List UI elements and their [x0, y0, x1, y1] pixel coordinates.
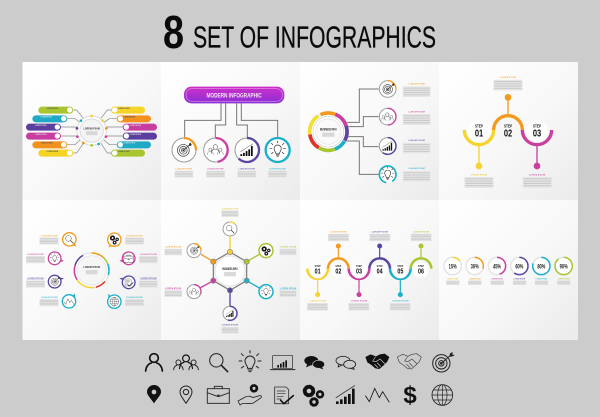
panel: circle with bubbles — [26, 233, 158, 308]
ring 60% — [511, 257, 528, 285]
pill labels: LOREM IPSUM — [129, 134, 142, 136]
stems — [476, 94, 540, 169]
icon row 1 — [146, 351, 455, 372]
icon: zigzag line — [365, 388, 389, 402]
icon: handshake outline — [397, 354, 421, 369]
icon: laptop chart — [270, 356, 295, 370]
icon: speech bubbles outline — [336, 356, 356, 369]
icon: light bulb — [239, 351, 261, 372]
step numbers: 05 — [397, 269, 403, 276]
panel: percentage rings — [444, 257, 572, 285]
icon: hand with gear — [238, 385, 261, 405]
step captions — [307, 232, 432, 311]
ring 90%: LOREM IPSUM — [558, 278, 570, 280]
node: upper left: LOREM IPSUM — [165, 247, 181, 249]
item 2: LOREM IPSUM — [408, 111, 425, 113]
item: people: LOREM IPSUM — [207, 168, 224, 170]
item: target: LOREM IPSUM — [175, 168, 192, 170]
connectors — [347, 89, 379, 174]
ring 60%: 60% — [515, 264, 524, 270]
item: bulb: LOREM IPSUM — [269, 168, 286, 170]
multicolour ring — [303, 106, 354, 157]
connectors — [61, 110, 123, 153]
step 02: 02 — [504, 128, 512, 139]
ring 45%: 45% — [493, 264, 501, 270]
bubble top left: LOREM IPSUM — [41, 235, 58, 237]
step circles — [310, 262, 429, 278]
step numbers: STEP — [315, 264, 321, 268]
step numbers: 04 — [377, 269, 383, 276]
node: top: LOREM IPSUM — [222, 208, 238, 210]
hexagon centre: BUSINESS INFO — [222, 267, 238, 271]
ring 90% — [555, 257, 572, 285]
step numbers: 06 — [418, 269, 424, 276]
central ring: LOREM IPSUM — [83, 267, 100, 269]
ring 30% — [466, 257, 483, 285]
ring 80% — [533, 257, 550, 285]
ring 15%: 15% — [449, 264, 457, 270]
icon: gears — [304, 386, 323, 406]
pill labels: LOREM IPSUM — [46, 108, 59, 110]
step numbers: STEP — [335, 264, 341, 268]
panel: radial pills infographic — [26, 107, 157, 157]
pill labels: LOREM IPSUM — [123, 143, 136, 145]
step numbers — [315, 264, 424, 276]
item 1: LOREM IPSUM — [408, 84, 425, 86]
step captions: LOREM IPSUM — [351, 301, 367, 303]
bubble bottom left: LOREM IPSUM — [41, 297, 58, 299]
step numbers: 02 — [335, 269, 341, 276]
panel: six steps — [307, 232, 432, 311]
step captions: LOREM IPSUM — [500, 77, 516, 79]
step captions: LOREM IPSUM — [529, 174, 545, 176]
item 3: LOREM IPSUM — [408, 140, 425, 142]
step 03 — [526, 120, 548, 142]
ring 45% — [488, 257, 506, 285]
icon: target — [433, 352, 455, 372]
step numbers: STEP — [377, 264, 383, 268]
title: SET OF INFOGRAPHICS — [193, 20, 436, 54]
step 01 — [468, 120, 490, 142]
step 01: 01 — [475, 128, 483, 139]
step numbers: STEP — [397, 264, 403, 268]
title — [163, 6, 436, 58]
pill labels: LOREM IPSUM — [40, 117, 53, 119]
step captions: LOREM IPSUM — [330, 232, 347, 234]
hexagon nodes — [211, 249, 249, 293]
central ring: LOREM IPSUM — [83, 128, 100, 130]
node: upper right: LOREM IPSUM — [280, 247, 296, 249]
pill labels: LOREM IPSUM — [35, 125, 47, 127]
pill labels: LOREM IPSUM — [46, 151, 59, 153]
panel: hexagon — [164, 208, 297, 334]
bubble mid right 1: LOREM IPSUM — [140, 254, 157, 256]
icon: group — [174, 355, 198, 370]
icon: handshake solid — [365, 354, 389, 369]
node: lower left: LOREM IPSUM — [165, 288, 181, 290]
step 01: STEP — [475, 124, 483, 129]
ring 60%: LOREM IPSUM — [513, 278, 526, 280]
bubble bottom right: LOREM IPSUM — [126, 297, 143, 299]
step captions — [464, 77, 552, 188]
panel backgrounds — [22, 62, 578, 340]
icon: briefcase — [207, 386, 229, 403]
bubble mid right 2: LOREM IPSUM — [140, 278, 157, 280]
item: chart: LOREM IPSUM — [238, 168, 255, 170]
step numbers: 03 — [356, 269, 362, 276]
ring 30%: 30% — [471, 264, 479, 270]
pill labels — [35, 108, 142, 153]
item 4: LOREM IPSUM — [408, 168, 425, 170]
panel: three steps — [464, 77, 552, 188]
panel: modern infographic — [172, 87, 290, 178]
ring 15%: LOREM IPSUM — [447, 278, 459, 280]
pill labels: LOREM IPSUM — [35, 134, 47, 136]
header pill: MODERN INFOGRAPHIC — [206, 92, 262, 99]
connectors — [185, 103, 278, 139]
pill labels: LOREM IPSUM — [118, 108, 130, 110]
node: bottom: LOREM IPSUM — [222, 325, 238, 327]
icon row 2 — [147, 382, 453, 409]
ring 15% — [444, 257, 461, 285]
icon: map pin solid — [147, 385, 161, 403]
icon: person — [146, 354, 162, 371]
right pills — [111, 107, 157, 157]
bubble mid left 1: LOREM IPSUM — [27, 254, 44, 256]
pill labels: LOREM IPSUM — [41, 143, 53, 145]
ring 30%: LOREM IPSUM — [469, 278, 481, 280]
title: 8 — [163, 6, 184, 58]
icon: speech bubbles solid — [304, 356, 325, 369]
step captions: LOREM IPSUM — [309, 301, 326, 303]
pill labels: LOREM IPSUM — [123, 117, 136, 119]
step numbers: 01 — [315, 269, 321, 276]
icon: document check — [275, 387, 293, 404]
ring 80%: 80% — [537, 264, 546, 270]
icon: map pin outline — [180, 386, 192, 403]
centre label: BUSINESS INFO — [320, 127, 337, 132]
bubble top right: LOREM IPSUM — [126, 235, 143, 237]
step numbers: STEP — [418, 264, 424, 268]
step captions: LOREM IPSUM — [392, 301, 409, 303]
icon: growth bars — [336, 386, 355, 404]
left pills — [26, 107, 73, 157]
pill labels: LOREM IPSUM — [129, 125, 142, 127]
icon: globe — [432, 385, 453, 405]
step captions: LOREM IPSUM — [413, 232, 429, 234]
panel: business info tree — [303, 81, 431, 184]
step numbers: STEP — [356, 264, 362, 268]
ring 45%: LOREM IPSUM — [491, 278, 503, 280]
spokes — [200, 236, 259, 306]
pill labels: LOREM IPSUM — [118, 151, 130, 153]
ring 90%: 90% — [560, 264, 568, 270]
bubble mid left 2: LOREM IPSUM — [27, 278, 44, 280]
wave — [307, 258, 431, 279]
icon: dollar: $ — [403, 382, 417, 409]
step 02: STEP — [504, 124, 512, 129]
wave arcs — [464, 116, 552, 145]
step captions: LOREM IPSUM — [371, 232, 388, 234]
ring 80%: LOREM IPSUM — [535, 278, 548, 280]
step 03: STEP — [533, 124, 541, 129]
step captions: LOREM IPSUM — [471, 174, 487, 176]
step 03: 03 — [533, 128, 541, 139]
stems and dots — [315, 243, 423, 297]
step 02 — [497, 120, 519, 142]
node: lower right: LOREM IPSUM — [280, 288, 296, 290]
icon: magnifier — [210, 354, 228, 372]
